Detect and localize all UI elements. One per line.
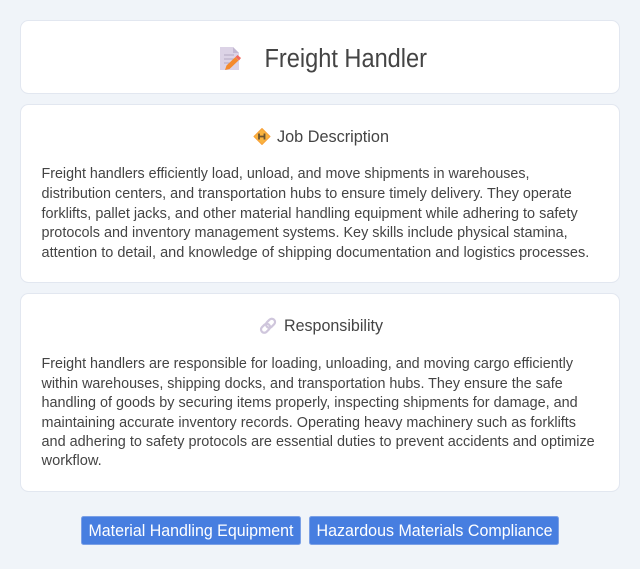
panel: job description: [20, 104, 620, 282]
text: job description body: distribution centers, and transportation hubs to ensure timely delivery. They operate: [42, 186, 572, 202]
tag: hazardous materials compliance: Hazardous Materials Compliance: [316, 521, 552, 540]
tag: material handling equipment: Material Handling Equipment: [88, 521, 294, 540]
panel: responsibility: [20, 294, 620, 492]
text: job description body: protocols and inventory management systems. Key skills include physical stamina,: [42, 225, 568, 241]
text: responsibility body: and adhering to safety protocols are essential duties to prevent accidents and optimize: [42, 434, 595, 450]
tag: material handling equipment: [82, 516, 300, 544]
tag: hazardous materials compliance: [310, 516, 558, 544]
icon: diamond road sign: [254, 128, 270, 144]
text: job description body: Freight handlers efficiently load, unload, and move shipments in warehouses,: [42, 166, 530, 182]
text: responsibility body: maintaining accurate inventory records. Operating heavy machinery such as forklifts: [42, 415, 576, 431]
text: responsibility body: [41, 356, 595, 469]
heading: job description: Job Description: [277, 127, 389, 146]
text: job description body: attention to detail, and knowledge of shipping documentation and logistics processes.: [42, 245, 589, 261]
heading: responsibility: Responsibility: [284, 316, 383, 335]
text: responsibility body: Freight handlers are responsible for loading, unloading, and moving cargo efficiently: [42, 356, 574, 372]
panel: title header: [20, 20, 620, 94]
text: job description body: [42, 166, 589, 261]
icon: document with pencil: [220, 47, 241, 70]
text: responsibility body: within warehouses, shipping docks, and transportation hubs. They ensure the safe: [41, 376, 563, 392]
text: job description body: forklifts, pallet jacks, and other material handling equipment while adhering to safety: [42, 206, 578, 222]
title: Freight Handler: [264, 45, 427, 73]
text: responsibility body: handling of goods by securing items properly, inspecting shipments for damage, and: [42, 395, 578, 411]
icon: chain link: [260, 317, 276, 334]
text: responsibility body: workflow.: [41, 453, 102, 469]
